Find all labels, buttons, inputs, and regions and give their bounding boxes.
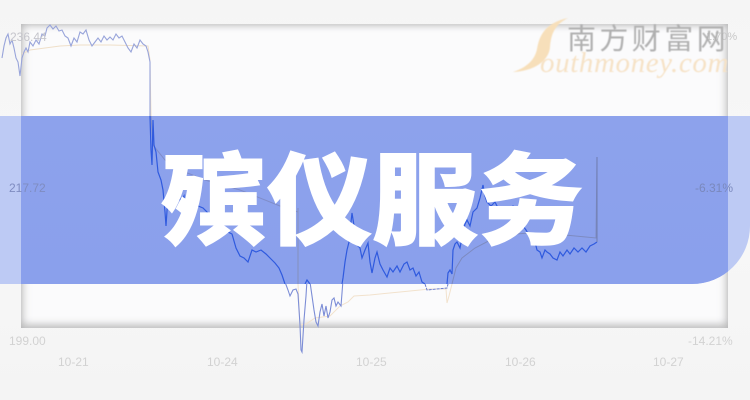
logo domain: outhmoney.com <box>540 47 729 79</box>
date label: 10-26: 10-26 <box>505 355 536 369</box>
axis label: 236.44: 236.44 <box>10 30 47 44</box>
price line, faint part <box>2 25 448 352</box>
axis label: 217.72: 217.72 <box>9 181 46 195</box>
blue title band <box>0 116 750 284</box>
southmoney watermark logo <box>514 16 729 79</box>
title: 殡仪服务 <box>161 120 583 266</box>
price line, in band <box>150 116 597 284</box>
average price line, faint part <box>22 45 452 325</box>
inset chart panel <box>21 24 728 328</box>
logo Chinese name: 南方财富网 <box>567 16 729 58</box>
axis label: -14.21%: -14.21% <box>688 334 733 348</box>
axis label: -6.31%: -6.31% <box>695 181 733 195</box>
date label: 10-24: 10-24 <box>207 355 238 369</box>
stock line chart <box>2 24 598 354</box>
axis label: 199.00: 199.00 <box>9 334 46 348</box>
date label: 10-27: 10-27 <box>653 355 684 369</box>
date label: 10-25: 10-25 <box>356 355 387 369</box>
darker band section inside panel <box>21 116 728 284</box>
average price line, in band <box>151 116 597 284</box>
axis label: 1.70%: 1.70% <box>706 31 737 43</box>
icon: swoosh S <box>514 18 568 72</box>
date label: 10-21: 10-21 <box>58 355 89 369</box>
